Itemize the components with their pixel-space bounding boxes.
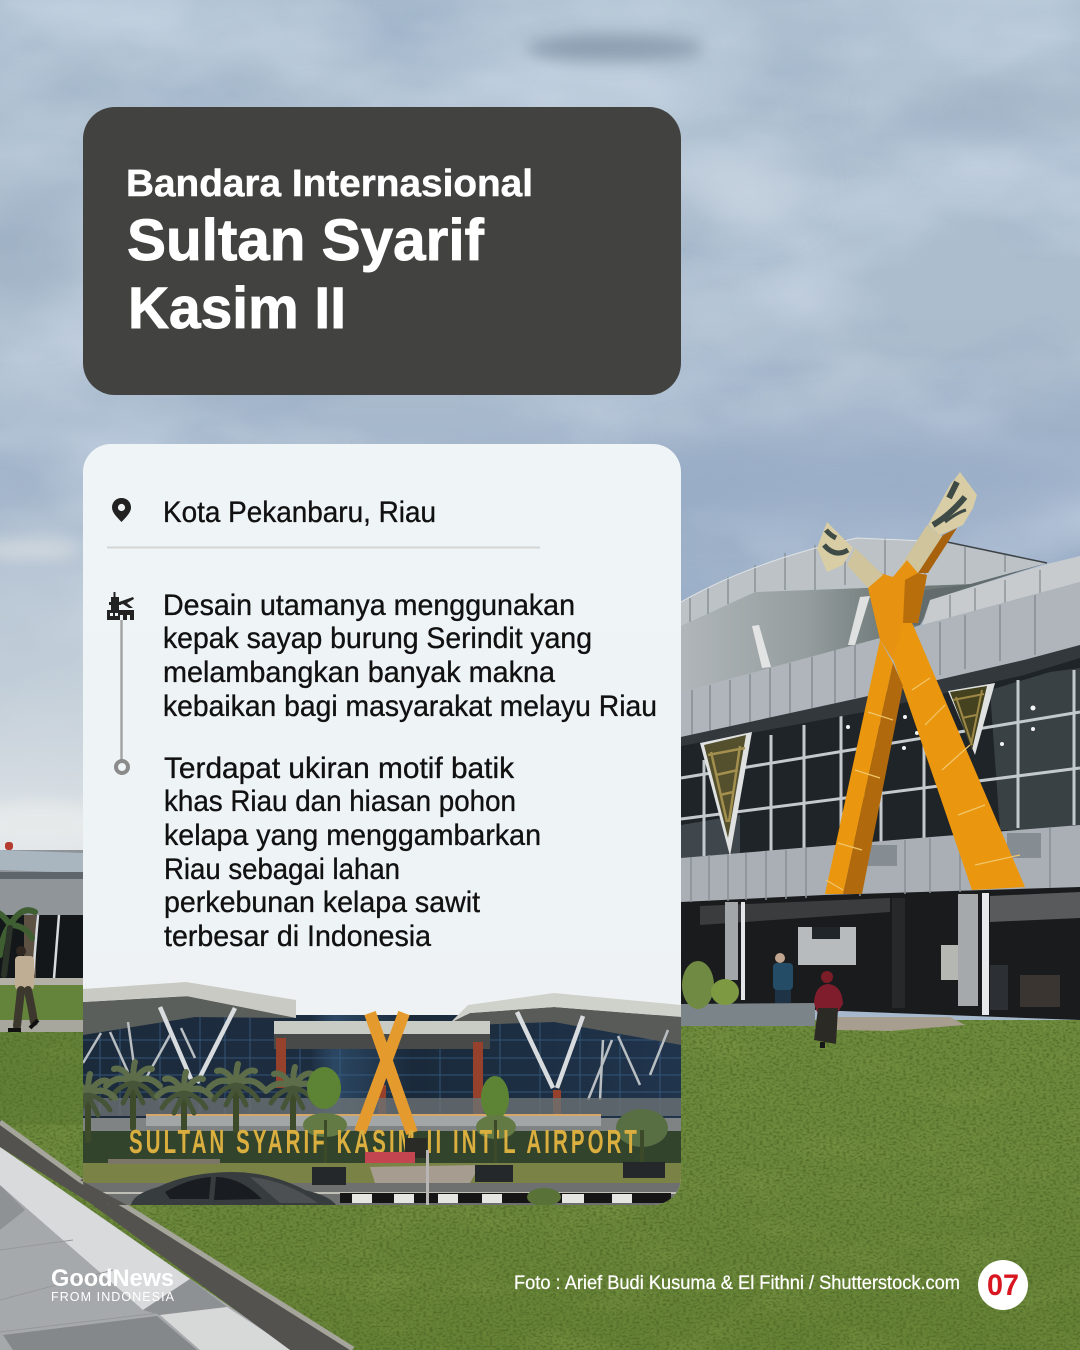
panel seams <box>826 678 1020 890</box>
upper parapet <box>922 556 1080 625</box>
logo: GoodNews from Indonesia <box>51 1265 175 1304</box>
red columns <box>276 1038 286 1088</box>
background photo: walkway and kerb <box>0 1120 353 1350</box>
ornament triangle right <box>948 683 995 755</box>
right soffit <box>450 1007 681 1045</box>
lawn, road <box>83 1163 681 1185</box>
hedges <box>83 1131 681 1165</box>
left soffit <box>83 996 296 1035</box>
heading line 2: Sultan Syarif <box>127 208 485 273</box>
roof band <box>681 538 1047 626</box>
glass facade <box>83 1015 681 1118</box>
photo: airport front view <box>61 982 681 1206</box>
text block: description 1 <box>163 589 657 723</box>
palm trees <box>61 1062 320 1140</box>
white struts <box>83 1007 668 1100</box>
text block: description 2 <box>164 752 541 953</box>
orange X <box>360 1013 412 1133</box>
right leg <box>869 586 1025 890</box>
palm <box>0 910 35 975</box>
ground floor <box>681 880 1080 1020</box>
background photo: lawn <box>0 1020 1080 1350</box>
windows <box>681 650 1080 860</box>
background photo: left side building <box>0 842 83 1032</box>
page number badge <box>978 1260 1028 1310</box>
panel: title <box>83 107 681 395</box>
window frames <box>681 670 1080 856</box>
background photo: terminal building <box>681 538 1080 1020</box>
right roof <box>450 993 681 1023</box>
upper fascia <box>681 582 1080 737</box>
logo: GoodNews from Indonesia: FROM INDONESIA <box>51 1290 175 1304</box>
page number badge: 07 <box>987 1269 1019 1302</box>
timeline connector <box>116 620 128 773</box>
left roof <box>83 982 296 1018</box>
text block: description 2: terbesar di Indonesia <box>164 920 431 953</box>
text block: description 1: melambangkan banyak makna <box>163 656 555 689</box>
lower fascia <box>681 825 1080 902</box>
orange X monument <box>817 472 1025 894</box>
center roof <box>274 1034 490 1049</box>
person in blue <box>773 953 793 1003</box>
left leg <box>825 640 893 894</box>
panel: info card <box>61 444 681 1206</box>
background photo: cloudy sky <box>0 0 1080 900</box>
icon: airport tower and plane <box>107 592 134 620</box>
heading line 1: Bandara Internasional <box>126 163 533 205</box>
railing and ledge <box>83 1098 681 1116</box>
text block: description 1: kepak sayap burung Serindit yang <box>163 622 592 655</box>
car <box>131 1172 336 1205</box>
text block: description 2: perkebunan kelapa sawit <box>164 886 481 919</box>
text block: description 1: kebaikan bagi masyarakat melayu Riau <box>163 690 657 723</box>
heading line 3: Kasim II <box>128 276 346 341</box>
road curb <box>340 1193 671 1203</box>
young trees <box>303 1067 668 1147</box>
sign obstructions <box>324 1120 644 1165</box>
text block: description 2: khas Riau dan hiasan pohon <box>164 785 516 818</box>
person in red <box>814 971 843 1048</box>
crossing and upper <box>868 560 927 660</box>
soffit <box>681 584 970 692</box>
logo: GoodNews from Indonesia: GoodNews <box>51 1265 174 1292</box>
text block: description 1: Desain utamanya menggunakan <box>163 589 575 622</box>
text block: description 2: Terdapat ukiran motif batik <box>164 752 515 785</box>
photo credit: Foto : Arief Budi Kusuma & El Fithni / Shutterstock.com <box>514 1273 960 1294</box>
carved head left <box>817 522 853 572</box>
planter boxes <box>312 1167 346 1185</box>
planter and plants <box>681 961 965 1031</box>
sign lettering: SULTAN SYARIF KASIM II INT'L AIRPORT <box>129 1123 640 1160</box>
location text: Kota Pekanbaru, Riau <box>163 496 436 529</box>
carved head right <box>928 472 977 535</box>
kerb corner <box>80 1179 127 1205</box>
text block: description 2: kelapa yang menggambarkan <box>164 819 541 852</box>
icon: location pin <box>112 498 131 522</box>
text block: description 2: Riau sebagai lahan <box>164 853 400 886</box>
ornament triangle left <box>700 732 752 856</box>
person walking, left <box>8 946 38 1030</box>
tan arms <box>897 525 943 573</box>
